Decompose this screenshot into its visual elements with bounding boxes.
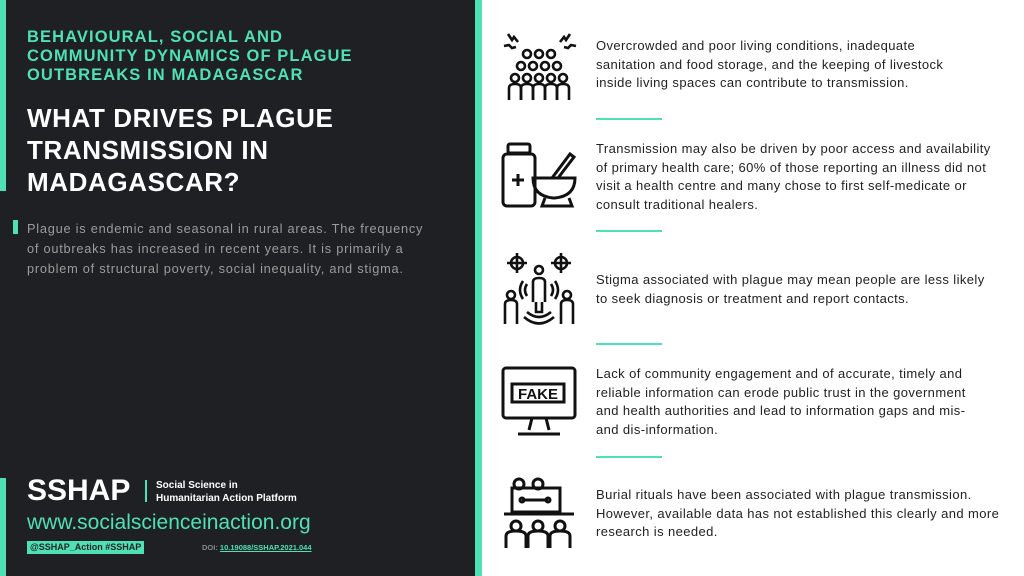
panel: left dark bbox=[0, 0, 475, 576]
text 1: Overcrowded and poor living conditions, inadequate bbox=[596, 38, 915, 53]
title: MADAGASCAR? bbox=[27, 167, 240, 197]
text 4: and health authorities and lead to information gaps and mis- bbox=[596, 403, 965, 418]
text 1 bbox=[596, 38, 943, 90]
title bbox=[27, 103, 333, 197]
subtitle bbox=[27, 28, 353, 84]
text 4: and dis-information. bbox=[596, 422, 718, 437]
intro text: of outbreaks has increased in recent years. It is primarily a bbox=[27, 241, 403, 256]
icon: crowd bbox=[504, 33, 576, 100]
logo: Humanitarian Action Platform bbox=[156, 492, 297, 504]
icon: fake news monitor: FAKE bbox=[518, 386, 558, 403]
doi: DOI: 10.19088/SSHAP.2021.044 bbox=[202, 543, 312, 552]
accent stripe top bbox=[0, 0, 6, 191]
icon: stigma bbox=[504, 253, 574, 325]
text 4: Lack of community engagement and of accurate, timely and bbox=[596, 366, 962, 381]
text 2: consult traditional healers. bbox=[596, 197, 758, 212]
logo: SSHAP bbox=[27, 474, 130, 507]
text 5: Burial rituals have been associated with plague transmission. bbox=[596, 487, 972, 502]
text 3: Stigma associated with plague may mean people are less likely bbox=[596, 272, 985, 287]
text 1: sanitation and food storage, and the keeping of livestock bbox=[596, 57, 943, 72]
text 4 bbox=[596, 366, 966, 437]
subtitle: BEHAVIOURAL, SOCIAL AND bbox=[27, 28, 283, 46]
icon: burial bbox=[504, 478, 574, 548]
text 5: However, available data has not established this clearly and more bbox=[596, 506, 999, 521]
icon: medicine and mortar bbox=[502, 142, 576, 208]
accent stripe bottom bbox=[0, 478, 6, 576]
subtitle: OUTBREAKS IN MADAGASCAR bbox=[27, 66, 303, 84]
subtitle: COMMUNITY DYNAMICS OF PLAGUE bbox=[27, 47, 353, 65]
text 3 bbox=[596, 272, 985, 306]
text 2: of primary health care; 60% of those reporting an illness did not bbox=[596, 160, 986, 175]
icon: fake news monitor bbox=[502, 366, 576, 436]
text 2: visit a health centre and many chose to first self-medicate or bbox=[596, 178, 967, 193]
text 5: research is needed. bbox=[596, 524, 718, 539]
right accent bar bbox=[475, 0, 482, 576]
title: WHAT DRIVES PLAGUE bbox=[27, 103, 333, 133]
hashtag tag: @SSHAP_Action #SSHAP bbox=[30, 542, 141, 552]
intro text: problem of structural poverty, social inequality, and stigma. bbox=[27, 261, 404, 276]
logo bbox=[27, 474, 297, 507]
text 2: Transmission may also be driven by poor access and availability bbox=[596, 141, 991, 156]
text 5 bbox=[596, 487, 999, 539]
logo: Social Science in bbox=[156, 480, 238, 491]
text 3: to seek diagnosis or treatment and report contacts. bbox=[596, 291, 909, 306]
url: www.socialscienceinaction.org bbox=[27, 511, 311, 534]
text 4: reliable information can erode public trust in the government bbox=[596, 385, 966, 400]
text 2 bbox=[596, 141, 991, 212]
text 1: inside living spaces can contribute to transmission. bbox=[596, 75, 909, 90]
intro text: Plague is endemic and seasonal in rural areas. The frequency bbox=[27, 221, 423, 236]
title: TRANSMISSION IN bbox=[27, 135, 269, 165]
intro text bbox=[13, 220, 423, 276]
